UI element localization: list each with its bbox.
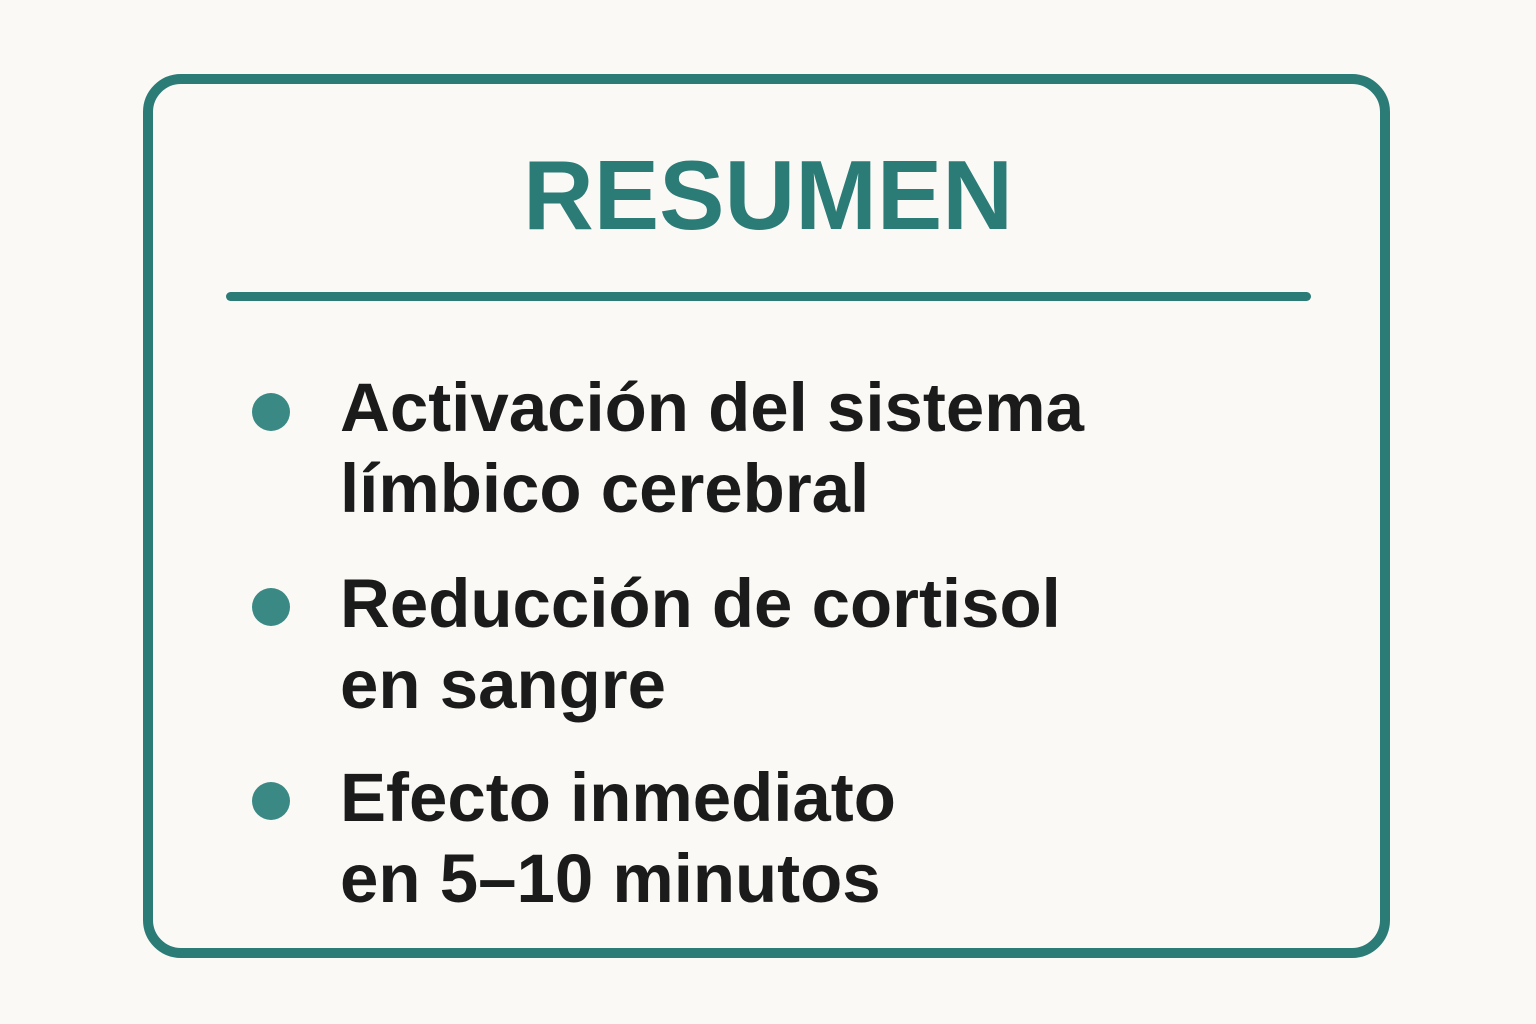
text: item 3 <box>340 759 896 917</box>
icon: bullet dot 2 <box>252 588 290 626</box>
icon: bullet dot 3 <box>252 782 290 820</box>
text: item 2: Reducción de cortisol <box>340 565 1061 642</box>
divider line <box>226 292 1311 301</box>
text: item 1 <box>340 369 1084 527</box>
panel: summary box <box>143 74 1390 958</box>
icon: bullet dot 1 <box>252 393 290 431</box>
bullet item 1 <box>252 369 1084 527</box>
text: item 2 <box>340 565 1061 723</box>
text: item 3: Efecto inmediato <box>340 759 896 836</box>
text: item 1: límbico cerebral <box>340 450 869 527</box>
text: item 3: en 5–10 minutos <box>340 840 881 917</box>
text: item 1: Activación del sistema <box>340 369 1084 446</box>
title: RESUMEN <box>523 140 1013 250</box>
text: item 2: en sangre <box>340 646 666 723</box>
bullet item 3 <box>252 759 896 917</box>
bullet item 2 <box>252 565 1061 723</box>
